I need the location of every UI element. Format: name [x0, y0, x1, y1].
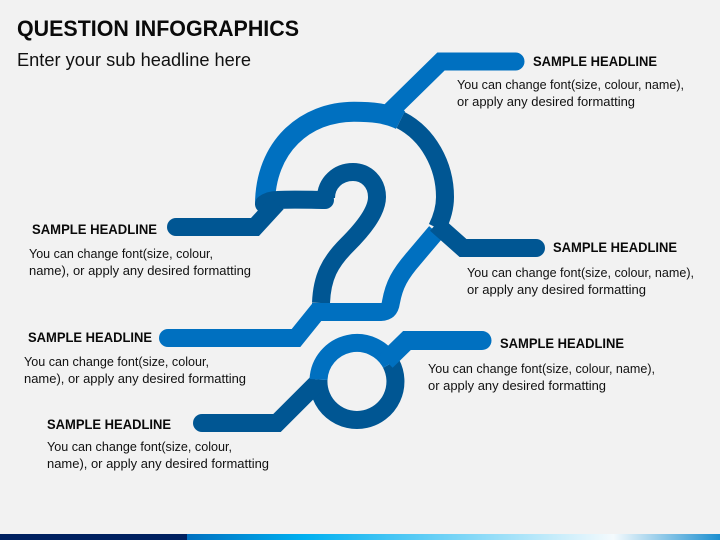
text block: upper left: SAMPLE HEADLINE [32, 222, 157, 237]
text block: lower right [428, 336, 655, 393]
hook outer arc with top connector [265, 52, 524, 205]
text block: top right [457, 54, 684, 109]
base overlap [312, 303, 345, 312]
subtitle: Enter your sub headline here [17, 49, 251, 70]
text block: top right: SAMPLE HEADLINE [533, 54, 657, 69]
title: QUESTION INFOGRAPHICS [17, 16, 299, 41]
text block: middle right: or apply any desired formatting [467, 282, 646, 297]
text block: middle left: name), or apply any desired formatting [24, 371, 246, 386]
question mark graphic [159, 52, 545, 432]
footer bar [0, 534, 720, 540]
text block: upper left [29, 222, 251, 278]
stem right side with base and left connector [159, 232, 436, 347]
text block: top right: or apply any desired formatting [457, 94, 635, 109]
hook right arc with right connector [400, 120, 545, 257]
text block: lower left [47, 417, 269, 471]
text block: middle left [24, 330, 246, 386]
text block: middle right [467, 240, 694, 297]
text block: lower right: SAMPLE HEADLINE [500, 336, 624, 351]
dot upper ring with right connector [318, 331, 492, 380]
text block: lower right: or apply any desired formatting [428, 378, 606, 393]
text block: lower right: You can change font(size, colour, name), [428, 361, 655, 376]
text block: middle right: You can change font(size, colour, name), [467, 265, 694, 280]
inner curl with left connector [167, 172, 377, 303]
text block: lower left: name), or apply any desired formatting [47, 456, 269, 471]
text block: lower left: SAMPLE HEADLINE [47, 417, 171, 432]
text block: middle right: SAMPLE HEADLINE [553, 240, 677, 255]
text block: upper left: You can change font(size, colour, [29, 246, 213, 261]
text block: middle left: SAMPLE HEADLINE [28, 330, 152, 345]
text block: lower left: You can change font(size, colour, [47, 439, 232, 454]
text block: middle left: You can change font(size, colour, [24, 354, 209, 369]
text block: top right: You can change font(size, colour, name), [457, 77, 684, 92]
text block: upper left: name), or apply any desired formatting [29, 263, 251, 278]
dot lower ring [193, 364, 395, 432]
